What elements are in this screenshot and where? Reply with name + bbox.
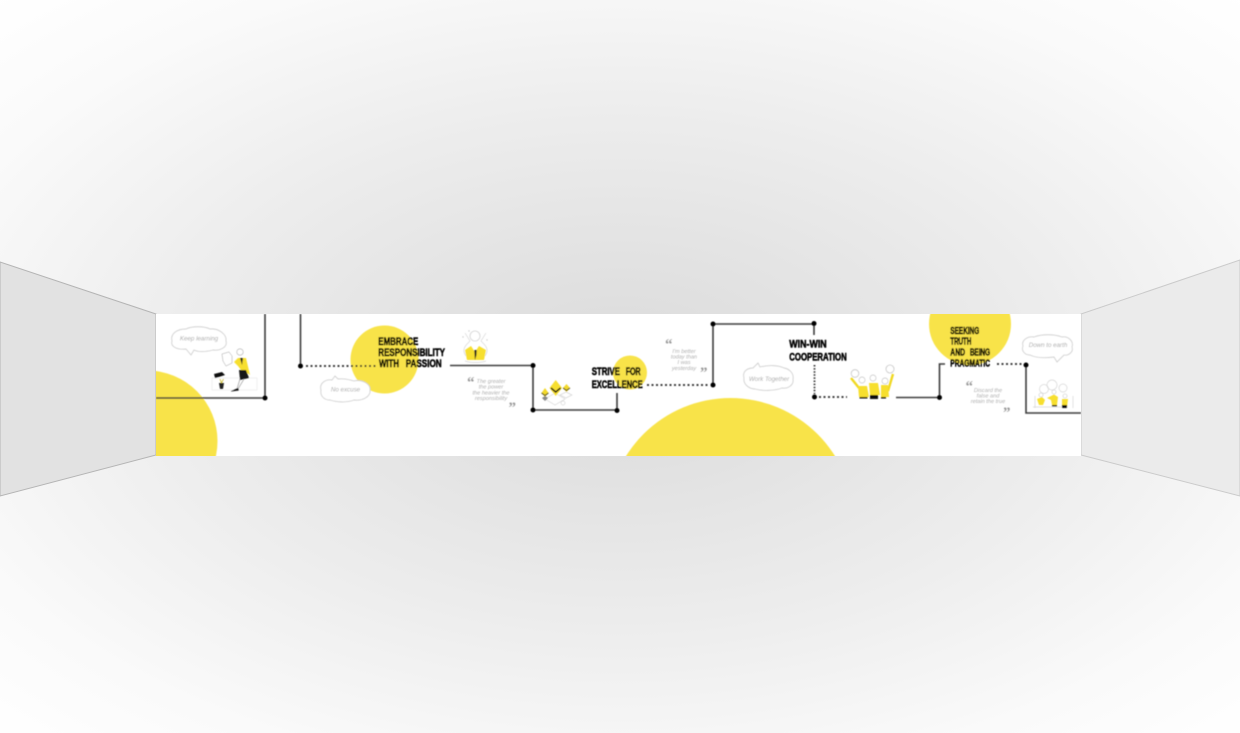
yellow circle: bottom centre [608, 398, 854, 644]
speech bubble: no excuse: No excuse [331, 386, 361, 394]
quote: better today than yesterday: I'm better [672, 349, 697, 355]
right wall [1081, 260, 1240, 496]
speech bubble: no excuse [321, 376, 370, 402]
left wall [0, 262, 156, 496]
heading: seeking truth and being pragmatic: AND [950, 347, 965, 358]
speech bubble: work together [744, 363, 793, 390]
heading: seeking truth and being pragmatic: BEING [970, 347, 990, 358]
yellow circle: seeking truth [929, 283, 1011, 365]
panel: values banner [156, 314, 1081, 456]
quote: the greater the power: the power [479, 384, 504, 390]
icon: lightbulb figure [462, 330, 488, 362]
heading: embrace responsibility with passion: PASSION [406, 358, 442, 370]
heading: embrace responsibility with passion [378, 336, 445, 370]
speech bubble: keep learning [172, 327, 226, 355]
quote: the greater the power: The greater [477, 379, 507, 385]
heading: win-win cooperation: COOPERATION [789, 352, 847, 364]
heading: embrace responsibility with passion: WITH [379, 358, 399, 370]
speech bubble: down to earth: Down to earth [1029, 342, 1068, 349]
heading: strive for excellence [592, 366, 643, 391]
yellow circle: strive for excellence [613, 356, 647, 390]
heading: seeking truth and being pragmatic [950, 326, 990, 369]
heading: win-win cooperation: WIN-WIN [789, 338, 827, 350]
quote: better today than yesterday: “ [665, 337, 673, 353]
heading: embrace responsibility with passion: EMBRACE [378, 336, 418, 348]
quote: discard the false: false and [977, 394, 1000, 400]
yellow circle: bottom left [156, 370, 218, 456]
connector line: to strive for excellence [450, 363, 620, 413]
icon: three people cheering [851, 365, 894, 399]
quote: discard the false [966, 380, 1010, 412]
quote: better today than yesterday: I was [677, 360, 691, 366]
quote: the greater the power: responsibility [475, 396, 508, 402]
quote: better today than yesterday [665, 338, 708, 372]
quote: better today than yesterday: ” [700, 365, 708, 381]
heading: strive for excellence: FOR [626, 366, 641, 378]
icon: person reading on bench [212, 349, 257, 392]
connector line: to win-win cooperation [647, 321, 816, 388]
icon: team discussion [1033, 380, 1073, 408]
quote: better today than yesterday: today than [671, 354, 697, 360]
quote: the greater the power: ” [508, 400, 516, 416]
quote: discard the false: ” [1003, 405, 1010, 421]
quote: discard the false: “ [966, 379, 974, 395]
quote: the greater the power: the heavier the [472, 390, 510, 396]
yellow circle: embrace responsibility [350, 326, 418, 394]
heading: win-win cooperation [789, 338, 847, 364]
connector line: first corner [156, 314, 268, 400]
heading: strive for excellence: EXCELLENCE [592, 379, 643, 391]
connector line: to seeking truth [896, 364, 945, 400]
heading: seeking truth and being pragmatic: PRAGMATIC [950, 358, 990, 369]
icon: yellow diamonds [542, 380, 572, 405]
speech bubble: work together: Work Together [749, 376, 790, 383]
heading: embrace responsibility with passion: RESPONSIBILITY [378, 347, 445, 359]
heading: seeking truth and being pragmatic: TRUTH [950, 337, 971, 348]
speech bubble: keep learning: Keep learning [180, 336, 219, 342]
connector line: to embrace responsibility [298, 314, 377, 368]
quote: discard the false: Discard the [974, 388, 1002, 394]
heading: strive for excellence: STRIVE [592, 366, 620, 378]
quote: the greater the power: “ [467, 375, 475, 391]
quote: discard the false: retain the true [971, 399, 1005, 405]
quote: better today than yesterday: yesterday [671, 366, 697, 372]
connector line: from win-win cooperation [812, 365, 847, 400]
heading: seeking truth and being pragmatic: SEEKING [950, 326, 979, 337]
quote: the greater the power [467, 376, 516, 408]
connector line: to final corner [997, 362, 1081, 413]
speech bubble: down to earth [1022, 335, 1072, 362]
